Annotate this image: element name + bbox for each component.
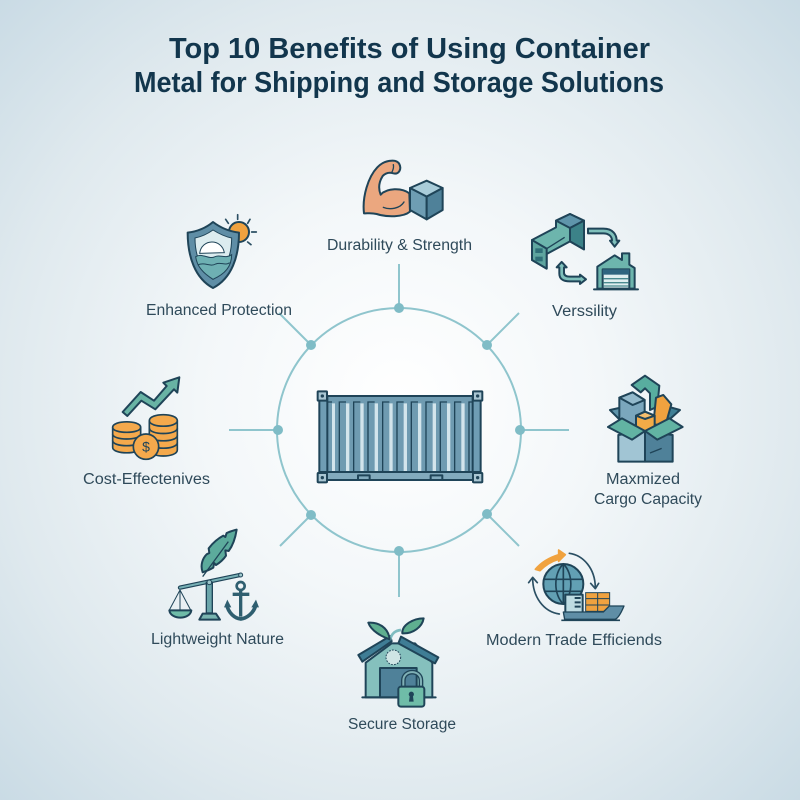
icon: flexed arm and cube (364, 161, 443, 219)
label: versatility: Verssility (552, 303, 617, 320)
icon: shield and sun (188, 215, 256, 288)
title: Top 10 Benefits of Using Container (169, 33, 650, 65)
title: Metal for Shipping and Storage Solutions (134, 67, 664, 99)
label: lightweight: Lightweight Nature (151, 631, 284, 648)
label: modern trade: Modern Trade Efficiends (486, 632, 662, 649)
label: durability: Durability & Strength (327, 237, 472, 254)
label: cargo capacity (594, 471, 702, 508)
label: cargo capacity: Maxmized (606, 471, 680, 488)
icon: house with lock and sprout (358, 618, 438, 707)
icon: versatility container and warehouse (532, 214, 638, 289)
icon: open box with cargo (608, 376, 683, 462)
icon: scales, feather and anchor (169, 530, 259, 620)
icon: shipping container (318, 391, 482, 482)
label: cost: Cost-Effectenives (83, 471, 210, 488)
icon: coins and rising arrow: $ (142, 439, 150, 455)
label: cargo capacity: Cargo Capacity (594, 491, 702, 508)
hub ring with spokes (229, 264, 569, 597)
icon: coins and rising arrow (113, 377, 179, 459)
title (134, 33, 664, 99)
icon: globe and cargo ship (529, 550, 624, 620)
label: enhanced protection: Enhanced Protection (146, 302, 292, 319)
label: secure storage: Secure Storage (348, 716, 456, 733)
